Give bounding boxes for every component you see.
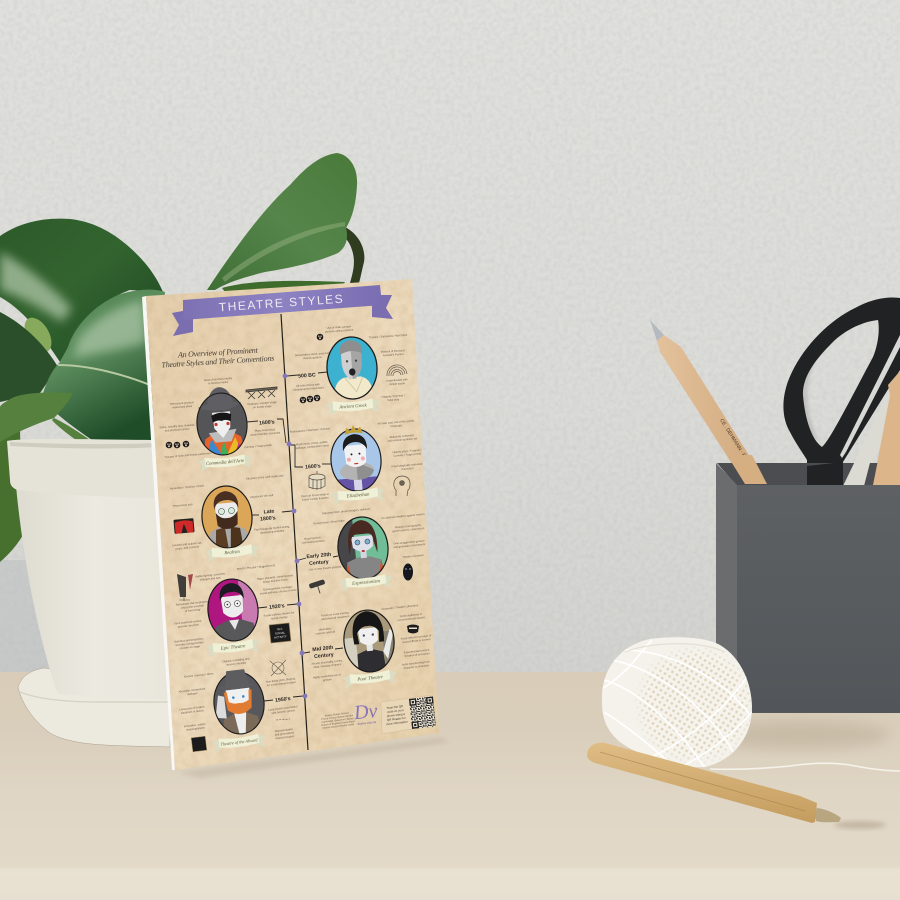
convention notes: middle: Use of new theatre projects xyxy=(308,564,342,572)
convention notes: lower: critical the potential xyxy=(181,603,204,610)
icon: amphitheatre arches xyxy=(387,365,407,376)
pencil point xyxy=(650,320,664,341)
convention notes: upper: Thespis / Sophocles / Aeschylus xyxy=(369,333,408,339)
convention notes: lower: Lampoons of English xyxy=(179,704,205,711)
convention notes: upper: Blank verse, prose, asides, xyxy=(296,440,328,446)
date labels: Late xyxy=(263,509,275,515)
QR instructions: Scan the QR xyxy=(386,704,403,710)
convention notes: middle: Estrangement, montage, xyxy=(263,584,293,592)
portrait: Realism xyxy=(201,485,253,548)
date labels: Century xyxy=(309,559,329,567)
convention notes: middle: Disjointed time, dream imagery, delirious xyxy=(322,507,371,515)
icon: spinner prop xyxy=(309,579,328,596)
convention notes: lower: Beckett / Ionesco / Albee xyxy=(184,671,214,679)
name ribbon: Epic Theatre xyxy=(206,638,261,658)
icon: black square xyxy=(191,736,207,752)
convention notes: lower: meaningfulness xyxy=(186,725,206,732)
credits: Drama of England Drama Ideas xyxy=(321,720,356,727)
convention notes: lower: reminder of fragmentary xyxy=(175,640,204,647)
convention notes: middle: Georg Kaiser / Ernst Toller xyxy=(313,518,345,526)
name ribbon: Ancient Greek: Ancient Greek xyxy=(338,403,368,411)
convention notes: lower: Grotowski / Theatre Laboratory xyxy=(381,603,419,611)
twine body xyxy=(602,637,752,767)
leaf: upper right xyxy=(207,153,357,290)
convention notes: lower: ritual, intimacy of space xyxy=(313,662,342,669)
convention notes: middle: changes and sets xyxy=(200,575,222,582)
convention notes: upper: soliloquy, combination verse xyxy=(295,443,330,450)
QR instructions: phone using a xyxy=(387,712,405,718)
twine top edge xyxy=(625,644,725,652)
leaf: small front xyxy=(0,393,93,443)
convention notes: upper: Amphitheatre with xyxy=(386,377,408,383)
convention notes: middle: Over-exaggerated gesture xyxy=(393,538,425,545)
convention notes: lower: Long pauses punctuated xyxy=(268,704,298,712)
convention notes: upper: rhetoric gesture xyxy=(303,355,322,360)
convention notes: upper: persons acting costume xyxy=(325,328,354,334)
convention notes: middle: contrasted emotion xyxy=(302,538,325,545)
date labels: 1600's xyxy=(305,463,321,471)
name ribbon: Expressionism: Expressionism xyxy=(351,579,381,587)
scissors handle xyxy=(783,297,900,486)
name ribbon: Elizabethan: Elizabethan xyxy=(345,492,370,500)
storage box xyxy=(716,450,900,713)
convention notes: upper: Tragedy / Comedy / xyxy=(381,393,405,399)
banner right tail xyxy=(372,295,393,319)
ball of twine xyxy=(600,635,900,771)
name ribbon: Poor Theatre: Poor Theatre xyxy=(356,675,384,683)
convention notes: upper: and minimal symbolic set xyxy=(387,436,418,443)
convention notes: middle: Naturalism / Chekhov / Ibsen xyxy=(170,483,205,491)
wall xyxy=(0,0,900,673)
convention notes: upper: Rehearsed physical xyxy=(170,400,194,406)
convention notes: upper: Comedy / Tragicomedy xyxy=(393,451,422,458)
convention notes: lower: situations or places xyxy=(181,708,205,715)
desk shadows xyxy=(710,721,890,829)
name ribbon: Realism xyxy=(205,543,260,563)
convention notes: upper: Festival of Dionysus xyxy=(381,348,406,354)
name ribbon: Theatre of the Absurd xyxy=(211,733,267,753)
convention notes: lower: character to character xyxy=(403,663,430,670)
convention notes: lower: Representative xyxy=(275,727,294,733)
pen grain xyxy=(600,752,805,811)
scissors shadow on wall xyxy=(804,335,830,440)
convention notes: upper: Aristotle's Poetics xyxy=(383,352,405,357)
hanging leaf behind pot xyxy=(0,430,23,562)
convention notes: upper: improvised plays xyxy=(172,404,193,409)
centre leaf vein xyxy=(58,365,150,385)
pale bud xyxy=(19,313,57,357)
name ribbon: Epic Theatre: Epic Theatre xyxy=(220,644,247,652)
convention notes: lower: concern on stage xyxy=(179,644,201,650)
convention notes: lower: costume and set xyxy=(315,629,336,636)
bamboo pen xyxy=(587,743,841,823)
convention notes: middle: and grotesque movements xyxy=(393,542,426,549)
convention notes: lower: Actor transforming from xyxy=(402,659,431,667)
convention notes: middle: developing empathy xyxy=(260,528,285,535)
saucer inner edge xyxy=(20,692,170,702)
highlight on centre leaf xyxy=(74,300,146,358)
convention notes: upper: simple scene xyxy=(389,381,406,386)
convention notes: middle: Detailed and realistic set, xyxy=(172,541,202,547)
icon: blackboard: ACTIVITY xyxy=(274,634,287,640)
convention notes: upper: and physical humour xyxy=(165,427,190,433)
convention notes: lower: Vocal reflects message of xyxy=(400,633,432,641)
portrait: Ancient Greek xyxy=(325,335,379,402)
convention notes: middle: Introduced '4th wall' xyxy=(250,493,274,499)
QR panel box xyxy=(381,695,435,734)
convention notes: lower: episodic structure xyxy=(178,622,199,629)
convention notes: upper: Outdoors, wooden stage xyxy=(247,400,277,406)
name ribbon: Theatre of the Absurd: Theatre of the Absurd xyxy=(220,737,259,747)
convention notes: upper: choreographed movement xyxy=(292,385,324,392)
timeline line xyxy=(281,314,308,750)
convention notes: upper: Elaborate costumes, xyxy=(390,433,415,439)
convention notes: upper: Satire, morality play, slapstick xyxy=(159,423,195,429)
convention notes: upper: indoor candle theatres xyxy=(302,495,329,502)
convention notes: middle: Visible lighting, costumes xyxy=(195,571,226,579)
leaf: lower left dark xyxy=(0,312,58,402)
box left face xyxy=(716,463,737,713)
poster white edge xyxy=(142,296,175,770)
convention notes: lower: Highly controlled use of xyxy=(313,672,341,680)
date labels: 1800's xyxy=(260,515,276,523)
pot shadow under leaves xyxy=(10,442,160,449)
name ribbon: Elizabethan xyxy=(331,487,386,505)
title: THEATRE STYLES xyxy=(218,292,343,314)
name ribbon: Poor Theatre xyxy=(342,669,398,689)
convention notes: middle: props, and costume xyxy=(175,544,200,551)
plant stem xyxy=(342,227,364,283)
convention notes: lower: Experimental troupes, xyxy=(404,648,430,654)
convention notes: lower: and physical movement xyxy=(321,614,350,621)
convention notes: lower: Non-linear plots, illogical, xyxy=(266,676,296,684)
wooden pencil right xyxy=(873,371,900,485)
logo mark: Dv xyxy=(352,700,379,724)
portrait: Commedia dell'Arte xyxy=(196,387,248,456)
pot rim xyxy=(7,439,165,498)
poster paper xyxy=(146,279,439,770)
convention notes: upper: Declamatory verse, poet and xyxy=(295,351,330,357)
pot body xyxy=(16,486,170,700)
logo text: drama victoria xyxy=(357,720,377,726)
leaf vein highlight xyxy=(222,222,345,282)
leaf: centre xyxy=(42,290,165,445)
convention notes: upper: Plays improvised xyxy=(255,427,276,433)
convention notes: lower: Minimalist, xyxy=(318,626,332,632)
desk xyxy=(0,672,900,900)
wall shadow beside pot xyxy=(0,560,50,672)
name ribbon: Commedia dell'Arte xyxy=(198,454,253,472)
convention notes: middle: Signs, placards, contemporary xyxy=(257,573,294,581)
date labels: Mid 20th xyxy=(312,645,334,653)
box inside xyxy=(717,463,900,486)
icon: three masks Commedia xyxy=(166,441,189,448)
date labels: 1920's xyxy=(269,603,285,611)
name ribbon: Expressionism xyxy=(339,573,394,593)
twine lattice xyxy=(636,646,752,764)
icon: black skull mask xyxy=(403,564,413,580)
convention notes: upper: Open air thrust stage or xyxy=(301,492,329,498)
convention notes: upper: All male cast, use of fine poetic xyxy=(377,418,415,426)
convention notes: upper: Comedy / Tragicomedy xyxy=(244,443,272,449)
convention notes: middle: Rapid speech, xyxy=(304,535,322,541)
convention notes: lower: with frenetic speech xyxy=(271,708,296,715)
timeline connectors xyxy=(247,372,343,701)
date labels xyxy=(259,372,334,704)
convention notes: lower: dialogue xyxy=(187,691,198,696)
subtitle: Theatre Styles and Their Conventions xyxy=(161,354,275,369)
icon: head with thought xyxy=(394,476,410,496)
convention notes: lower: Absurdist, nonsensical xyxy=(178,686,206,694)
convention notes: middle: Psychologically truthful acting, xyxy=(254,524,290,532)
QR instructions: code on your xyxy=(387,708,404,714)
pencil body xyxy=(657,335,767,484)
box front xyxy=(737,485,900,713)
convention notes: lower: social change xyxy=(271,615,288,620)
convention notes: lower: gesture xyxy=(323,677,332,682)
timeline nodes xyxy=(283,374,307,698)
convention notes: upper: Psychologically motivated xyxy=(391,462,423,468)
credits: Prince Connor Nelson Sinclair xyxy=(321,714,354,721)
convention notes: middle: An abstract rebellion against realism xyxy=(381,512,425,520)
convention notes: lower: Small audiences in xyxy=(399,612,423,618)
convention notes: upper: language xyxy=(391,423,402,428)
banner left tail xyxy=(172,309,193,336)
date labels: Century xyxy=(314,652,334,660)
name ribbon: Commedia dell'Arte: Commedia dell'Arte xyxy=(206,459,245,467)
convention notes: lower xyxy=(174,599,432,740)
convention notes: upper: Stock characters mostly xyxy=(204,376,233,382)
QR panel xyxy=(381,695,436,734)
pen body xyxy=(587,743,817,823)
convention notes: middle: Theatre of protest xyxy=(402,553,424,559)
icon: blackboard: SOCIAL xyxy=(275,630,286,636)
icon: three masks Greek xyxy=(300,395,320,403)
portrait: Elizabethan xyxy=(330,425,382,492)
QR instructions: more information xyxy=(386,720,408,726)
portrait: Expressionism xyxy=(337,516,389,578)
convention notes: lower: Social outlines, theatre for xyxy=(263,610,295,618)
convention notes: lower: Focus on vocal training xyxy=(321,610,349,618)
highlight on large left leaf xyxy=(0,252,72,322)
convention notes: lower: sensory intensity xyxy=(226,660,247,667)
poster shadow xyxy=(178,738,450,778)
leaf: large left xyxy=(0,219,163,362)
convention notes: lower: Semi-scattered scenes, xyxy=(174,618,202,626)
convention notes: lower: Ascetic physicality, poetry, xyxy=(311,658,343,666)
loose string xyxy=(710,763,900,771)
portrait: Epic Theatre xyxy=(207,578,259,642)
banner band xyxy=(183,285,382,320)
icon: blackboard xyxy=(269,623,291,643)
plant xyxy=(0,153,364,562)
icon: red curtain xyxy=(173,518,195,534)
convention notes: lower: Rehearsals that emphasise xyxy=(175,599,209,607)
convention notes: upper: All male chorus with xyxy=(296,382,320,388)
icon: round stage xyxy=(309,471,325,490)
convention notes: lower: of 'becoming' xyxy=(185,607,201,613)
icon: trestle stage xyxy=(246,387,277,399)
scissors lower stub xyxy=(807,462,843,486)
subtitle: An Overview of Prominent xyxy=(177,346,259,359)
leaf: small sliver behind poster xyxy=(222,281,345,292)
subtitle xyxy=(161,346,275,369)
icon: blackboard: IN A xyxy=(277,627,283,631)
icon: lips xyxy=(407,624,419,634)
convention notes: middle: songs and live music xyxy=(263,577,289,584)
twine wraps xyxy=(600,640,752,770)
convention notes: middle xyxy=(170,473,426,595)
QR instructions: QR Reader for xyxy=(387,716,406,722)
art board poster xyxy=(140,275,445,775)
convention notes: upper: History plays / Tragedy / xyxy=(392,448,422,454)
credits: Cambridge, Beaumont, Baxter xyxy=(322,717,354,724)
icon: crossed out figure xyxy=(270,660,286,676)
icon: costume rack xyxy=(177,574,193,601)
white ruler xyxy=(843,372,900,485)
convention notes: upper: around familiar scenarios xyxy=(250,430,281,437)
convention notes: middle: Abstract scenography, xyxy=(395,523,422,529)
convention notes: upper xyxy=(159,324,423,502)
pencil lettering: CE . DEHMANN · FAB xyxy=(718,418,750,464)
scissors xyxy=(783,297,900,486)
date labels: 500 BC xyxy=(298,372,316,380)
icon: single mask xyxy=(317,334,323,340)
convention notes: lower: characterisation xyxy=(275,734,295,740)
convention notes: middle: Brecht / Piscator / Wagenknecht xyxy=(237,563,275,571)
name ribbon: Realism: Realism xyxy=(223,550,241,556)
convention notes: lower: sound effects or scenes xyxy=(402,637,431,644)
convention notes: lower: unconventional spaces xyxy=(397,615,426,622)
convention notes: middle: Structure of the 'well-made play' xyxy=(246,473,285,481)
saucer xyxy=(18,668,170,747)
convention notes: upper: on trestle stage xyxy=(253,404,272,409)
credits: Bowen Design Service xyxy=(325,711,350,717)
logo: drama victoria xyxy=(352,700,379,726)
date labels: 1600's xyxy=(259,419,275,427)
date labels: 1950's xyxy=(275,696,291,704)
icon: dashes xyxy=(276,719,290,720)
convention notes: upper: Use of male younger xyxy=(326,324,352,330)
convention notes: middle: garish colours, chiaroscuro xyxy=(392,526,425,533)
convention notes: middle: social address, chorus of voice xyxy=(260,588,297,595)
convention notes: lower: and generalised xyxy=(275,730,295,737)
convention notes: upper: Shakespeare / Marlowe / Johnson xyxy=(289,426,331,434)
convention notes: upper: characters xyxy=(401,466,414,471)
pencil left xyxy=(650,320,767,484)
pen metal tip xyxy=(815,808,841,822)
convention notes: upper: Satyr play xyxy=(387,397,400,402)
convention notes: upper: in familiar masks xyxy=(208,380,229,385)
convention notes: lower: Disjoint, unsettling and xyxy=(222,656,250,664)
convention notes: middle: Proscenium arch xyxy=(173,502,194,508)
credits: Drama Victoria Theatre Guide xyxy=(323,723,355,730)
convention notes: upper: Troupes of male and female performers xyxy=(164,451,212,459)
QR code xyxy=(409,696,436,729)
name ribbon: Ancient Greek xyxy=(326,398,380,416)
portrait: Theatre of the Absurd xyxy=(213,669,265,734)
portrait: Poor Theatre xyxy=(343,610,395,672)
convention notes: lower: Innovative, artistic, xyxy=(184,722,206,728)
convention notes: lower: theatres of encounter xyxy=(404,651,430,658)
convention notes: lower: for social drama in plays xyxy=(267,680,297,687)
paper mottling xyxy=(140,275,445,775)
convention notes: lower: Narration and projection, xyxy=(174,636,204,644)
pot xyxy=(7,439,170,747)
title banner xyxy=(172,285,393,336)
date labels: Early 20th xyxy=(306,552,332,560)
